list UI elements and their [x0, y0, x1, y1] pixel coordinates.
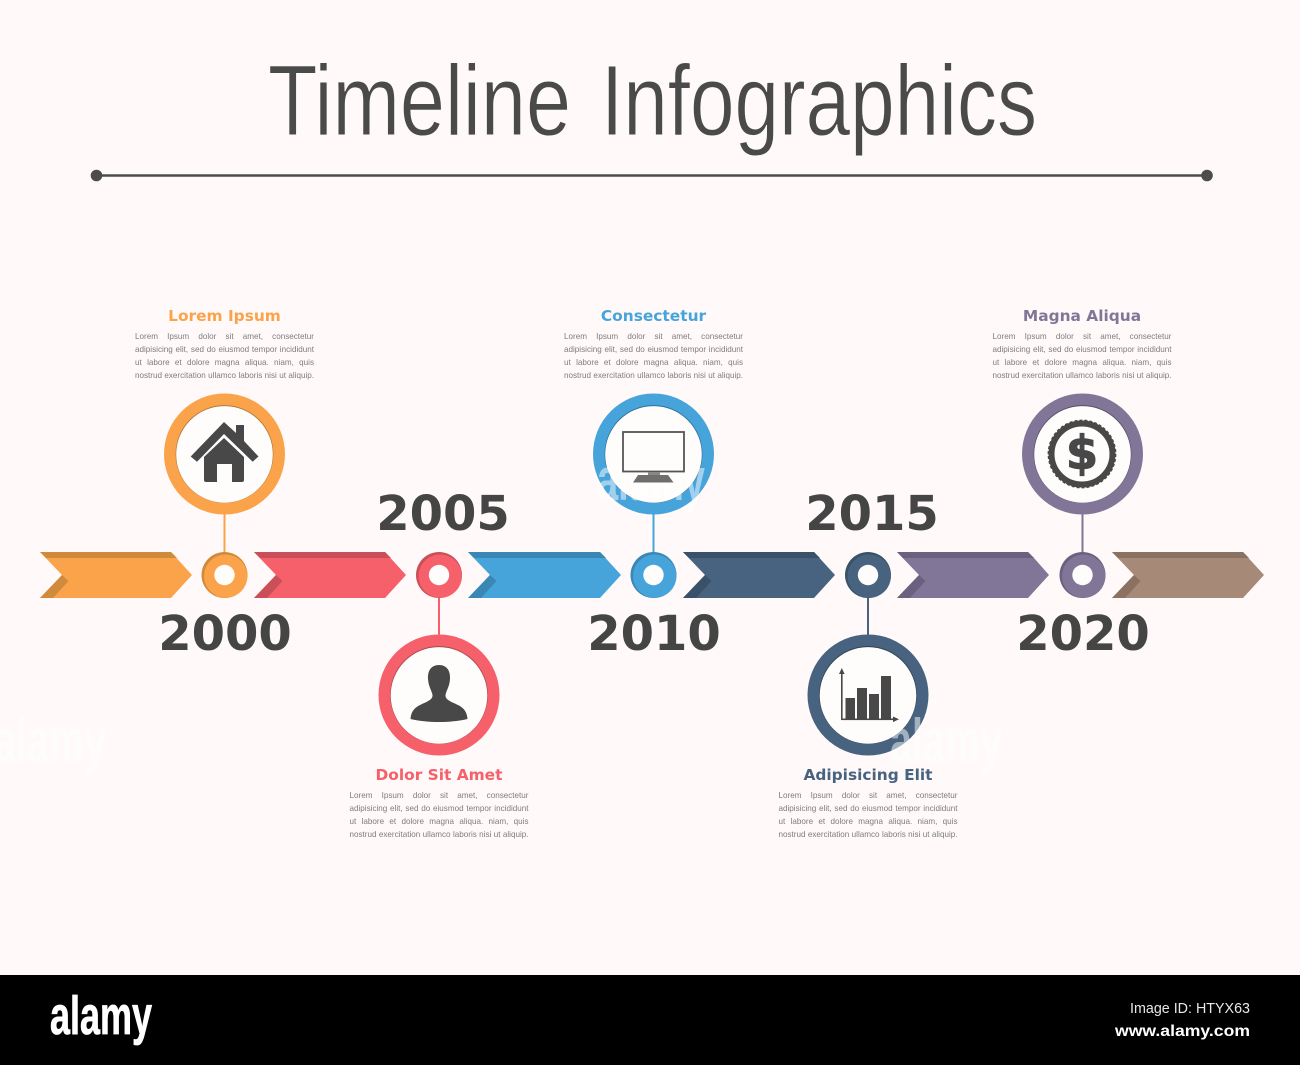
watermark over blue ring: alamy [597, 446, 705, 513]
text block: Dolor Sit Amet: Dolor Sit Amet [376, 766, 502, 784]
year 2005: 2005 [376, 486, 510, 542]
text block: Adipisicing Elit: ut labore et dolore magna aliqua. niam, quis [778, 817, 958, 826]
icon: bar chart [839, 668, 899, 722]
icon: monitor [623, 432, 684, 482]
text block: Dolor Sit Amet: ut labore et dolore magna aliqua. niam, quis [350, 817, 528, 826]
icon: house [191, 422, 258, 482]
milestone 2020: marker, connector and icon ring [1022, 394, 1143, 598]
arrow: orange segment [40, 552, 192, 598]
arrow: purple segment [897, 552, 1049, 598]
milestone 2000: marker, connector and icon ring [164, 394, 285, 598]
text block: Consectetur [564, 307, 743, 380]
year 2000: 2000 [158, 606, 292, 662]
watermark over navy ring: alamy [890, 707, 1002, 776]
arrow: brown segment [1112, 552, 1264, 598]
text block: Consectetur: ut labore et dolore magna aliqua. niam, quis [564, 358, 743, 367]
text block: Magna Aliqua: Magna Aliqua [1023, 307, 1141, 325]
text block: Magna Aliqua: Lorem Ipsum dolor sit amet, consectetur [992, 332, 1172, 341]
text block: Lorem Ipsum: ut labore et dolore magna aliqua. niam, quis [135, 358, 314, 367]
text block: Consectetur: Lorem Ipsum dolor sit amet, consectetur [564, 332, 743, 341]
text block: Lorem Ipsum [135, 307, 314, 380]
arrow: navy segment [683, 552, 835, 598]
text block: Dolor Sit Amet: Lorem Ipsum dolor sit amet, consectetur [350, 791, 528, 800]
text block: Magna Aliqua: ut labore et dolore magna aliqua. niam, quis [992, 358, 1172, 367]
text block: Adipisicing Elit: adipisicing elit, sed do eiusmod tempor incididunt [778, 804, 958, 813]
text block: Adipisicing Elit: Lorem Ipsum dolor sit amet, consectetur [778, 791, 958, 800]
text block: Dolor Sit Amet [350, 766, 528, 839]
text block: Consectetur: Consectetur [601, 307, 706, 325]
icon: person [410, 665, 468, 722]
icon: dollar coin [1048, 420, 1116, 488]
text block: Dolor Sit Amet: adipisicing elit, sed do eiusmod tempor incididunt [350, 804, 528, 813]
milestone 2015: marker, connector and icon ring [808, 552, 1002, 776]
icon: dollar coin: $ [1066, 426, 1098, 480]
footer image id: Image ID: HTYX63 [1130, 1000, 1250, 1017]
title [268, 45, 1037, 157]
title rule [91, 170, 1213, 181]
text block: Consectetur: adipisicing elit, sed do eiusmod tempor incididunt [564, 345, 743, 354]
text block: Lorem Ipsum: Lorem Ipsum [168, 307, 281, 325]
milestone 2010: marker, connector and icon ring [593, 394, 714, 598]
footer url: www.alamy.com [1114, 1023, 1250, 1040]
year 2015: 2015 [805, 486, 939, 542]
footer band [0, 975, 1300, 1065]
text block: Magna Aliqua: adipisicing elit, sed do eiusmod tempor incididunt [992, 345, 1172, 354]
text block: Dolor Sit Amet: nostrud exercitation ullamco laboris nisi ut aliquip. [350, 830, 528, 839]
text block: Adipisicing Elit: Adipisicing Elit [803, 766, 933, 784]
arrow: blue segment [468, 552, 621, 598]
text block: Lorem Ipsum: nostrud exercitation ullamco laboris nisi ut aliquip. [135, 371, 314, 380]
text block: Lorem Ipsum: Lorem Ipsum dolor sit amet, consectetur [135, 332, 314, 341]
text block: Adipisicing Elit [778, 766, 958, 839]
text block: Lorem Ipsum: adipisicing elit, sed do eiusmod tempor incididunt [135, 345, 314, 354]
year 2020: 2020 [1016, 606, 1150, 662]
text block: Magna Aliqua: nostrud exercitation ullamco laboris nisi ut aliquip. [992, 371, 1172, 380]
text block: Consectetur: nostrud exercitation ullamco laboris nisi ut aliquip. [564, 371, 743, 380]
year 2010: 2010 [587, 606, 721, 662]
arrow: red segment [254, 552, 406, 598]
text block: Adipisicing Elit: nostrud exercitation ullamco laboris nisi ut aliquip. [778, 830, 958, 839]
title: Timeline [268, 45, 571, 157]
text block: Magna Aliqua [992, 307, 1172, 380]
title: Infographics [601, 45, 1037, 157]
milestone 2005: marker, connector and icon ring [378, 552, 500, 756]
footer logo: alamy [50, 986, 152, 1046]
